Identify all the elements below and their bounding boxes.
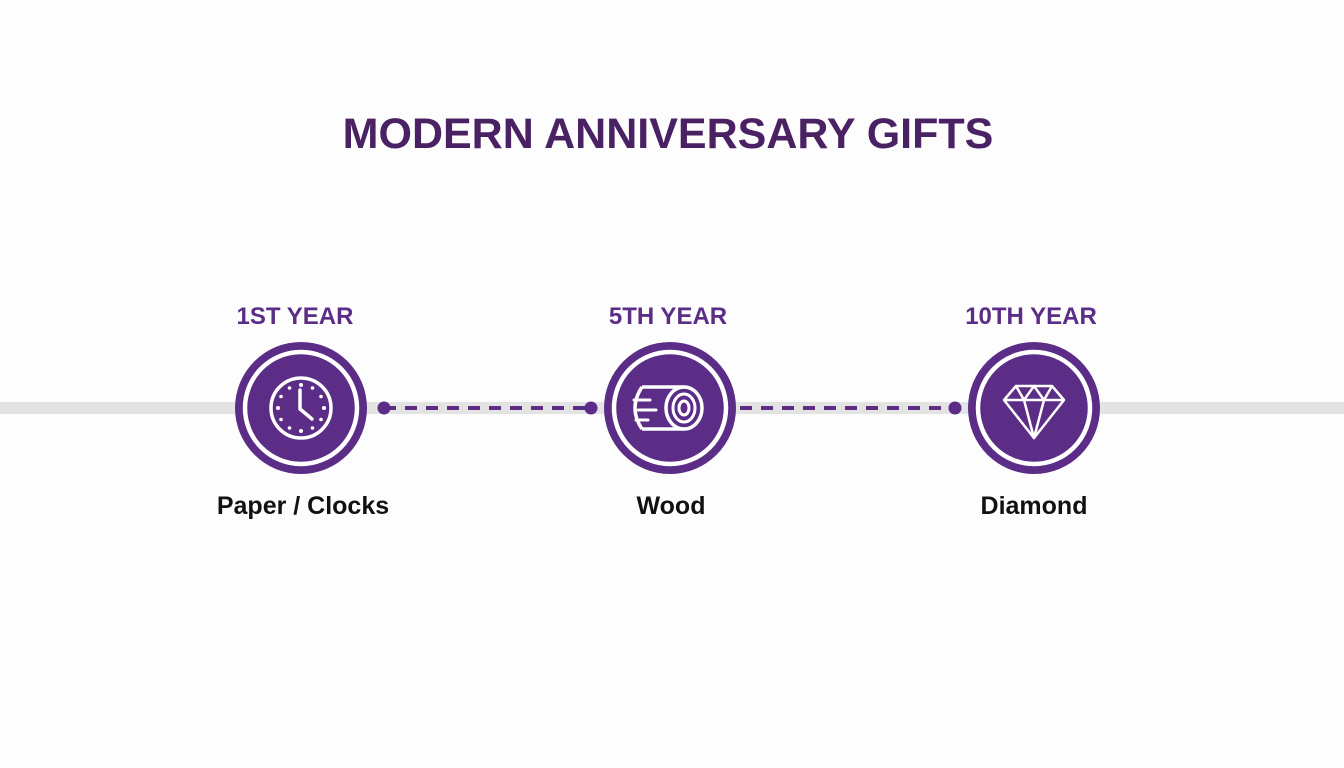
label: 1st year: 1ST YEAR (237, 303, 353, 330)
label: 10th year: 10TH YEAR (965, 303, 1097, 330)
gift: wood: Wood (637, 492, 705, 520)
title: MODERN ANNIVERSARY GIFTS (343, 110, 993, 158)
icon: diamond (968, 342, 1100, 474)
gift: diamond: Diamond (981, 492, 1087, 520)
icon: clock (235, 342, 367, 474)
icon: wood log (604, 342, 736, 474)
label: 5th year: 5TH YEAR (609, 303, 727, 330)
gift: paper/clocks: Paper / Clocks (217, 492, 389, 520)
